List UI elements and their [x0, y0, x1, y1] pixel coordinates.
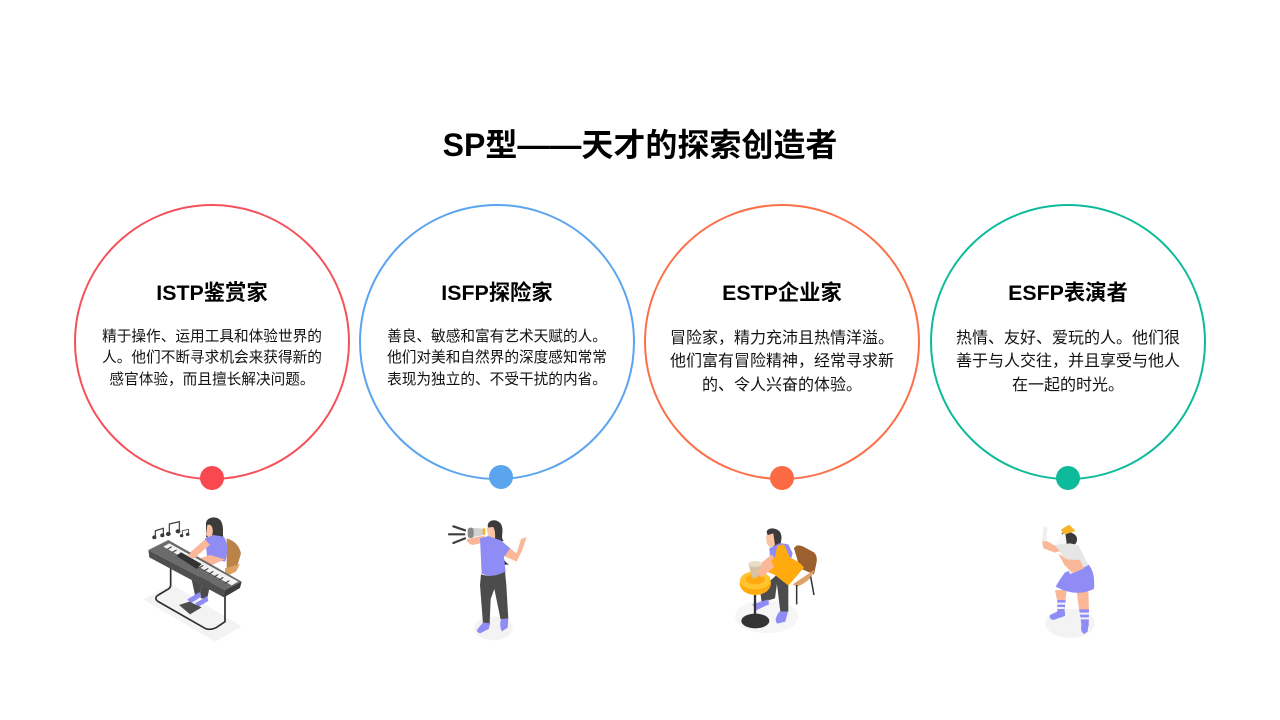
title: SP型——天才的探索创造者: [443, 127, 837, 163]
panel: ISFP: [387, 281, 607, 388]
panel: ISTP: [102, 281, 322, 388]
text: ESFP description: 善于与人交往，并且享受与他人: [956, 353, 1180, 370]
panel: ESTP: [670, 281, 894, 394]
text: ESFP description: 在一起的时光。: [1012, 376, 1124, 394]
panel: ESFP: [956, 281, 1180, 394]
text: ISFP description: 表现为独立的、不受干扰的内省。: [387, 372, 607, 388]
text: ISFP description: 善良、敏感和富有艺术天赋的人。: [387, 328, 607, 344]
text: ISTP description: [102, 328, 322, 388]
text: ISTP description: 人。他们不断寻求机会来获得新的: [102, 350, 322, 366]
text: ESTP description: 的、令人兴奋的体验。: [702, 376, 862, 394]
text: ISTP description: 感官体验，而且擅长解决问题。: [109, 372, 315, 388]
icon: woman at pottery wheel: [735, 528, 817, 633]
text: ESTP description: 冒险家，精力充沛且热情洋溢。: [670, 330, 894, 346]
text: ISFP description: [387, 328, 607, 388]
text: ESFP description: [956, 329, 1180, 394]
text: ESFP description: 热情、友好、爱玩的人。他们很: [956, 330, 1180, 346]
text: ISFP description: 他们对美和自然界的深度感知常常: [387, 350, 607, 366]
text: ESTP description: 他们富有冒险精神，经常寻求新: [670, 353, 894, 370]
text: ESTP description: [670, 329, 894, 394]
heading: ISTP: ISTP鉴赏家: [156, 281, 268, 305]
heading: ISFP: ISFP探险家: [441, 281, 553, 305]
icon: mime performer: [1042, 525, 1095, 638]
heading: ESTP: ESTP企业家: [722, 281, 842, 305]
text: ISTP description: 精于操作、运用工具和体验世界的: [102, 328, 322, 344]
icon: woman playing keyboard: [143, 517, 242, 642]
icon: woman with megaphone: [449, 520, 527, 640]
heading: ESFP: ESFP表演者: [1008, 281, 1128, 305]
